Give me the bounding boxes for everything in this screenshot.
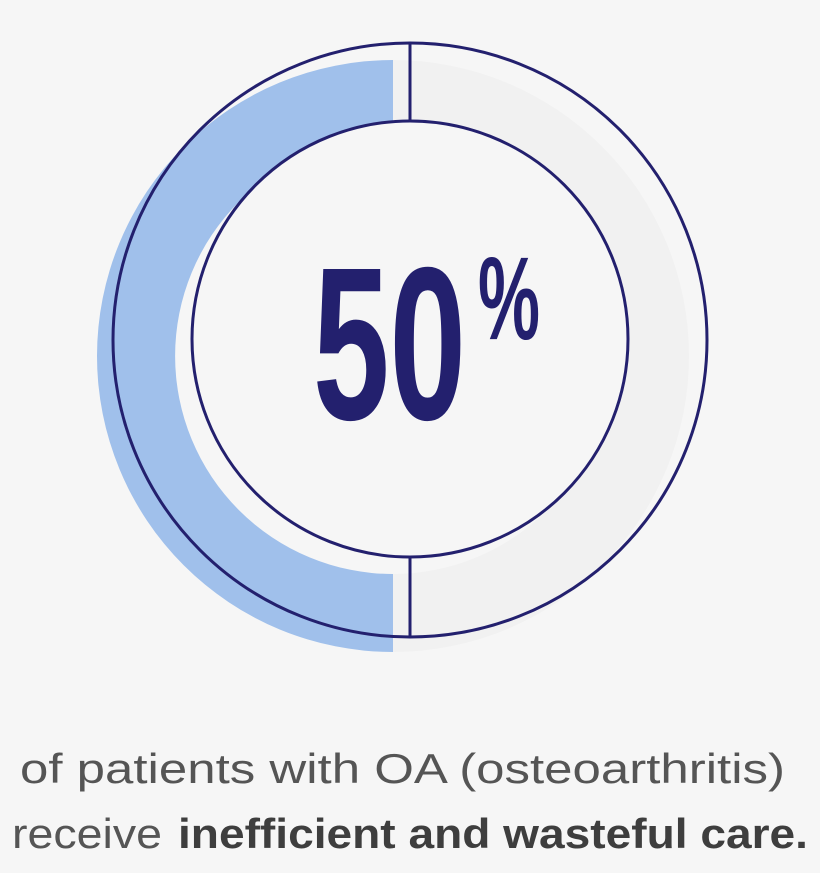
inner circle [192, 121, 628, 557]
caption text: inefficient and wasteful care. [178, 810, 808, 857]
caption text [12, 745, 808, 857]
big number 50%: % [478, 233, 540, 365]
donut chart [97, 43, 707, 652]
caption text: receive [12, 810, 162, 857]
big number 50%: 50 [313, 223, 466, 466]
outer circle outline [113, 43, 707, 637]
blue 50% half ring [97, 60, 393, 652]
gray remaining half ring [393, 60, 689, 652]
caption text: of patients with OA (osteoarthritis) [20, 745, 785, 792]
